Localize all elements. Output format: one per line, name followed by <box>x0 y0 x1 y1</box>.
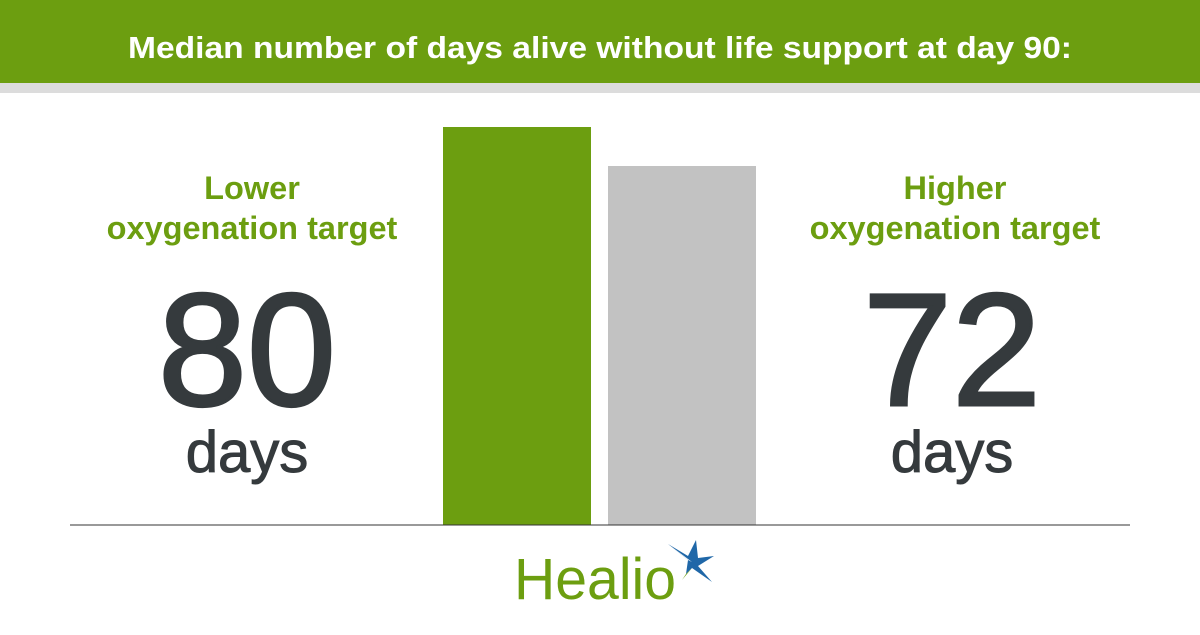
right label: higher oxygenation target <box>810 170 1101 246</box>
right value: 72 days: 72 <box>863 260 1041 439</box>
bar chart <box>70 127 1130 525</box>
left label: lower oxygenation target: Lower <box>204 170 300 206</box>
header bar <box>0 0 1200 93</box>
right value: 72 days: days <box>891 420 1013 485</box>
title: Median number of days alive without life support at day 90: <box>128 30 1072 65</box>
icon: star <box>668 540 714 582</box>
right label: higher oxygenation target: oxygenation target <box>810 210 1101 246</box>
left label: lower oxygenation target <box>107 170 398 246</box>
left label: lower oxygenation target: oxygenation target <box>107 210 398 246</box>
left value: 80 days: 80 <box>158 260 336 439</box>
logo: Healio: Healio <box>514 547 676 612</box>
right label: higher oxygenation target: Higher <box>904 170 1007 206</box>
left value: 80 days: days <box>186 420 308 485</box>
